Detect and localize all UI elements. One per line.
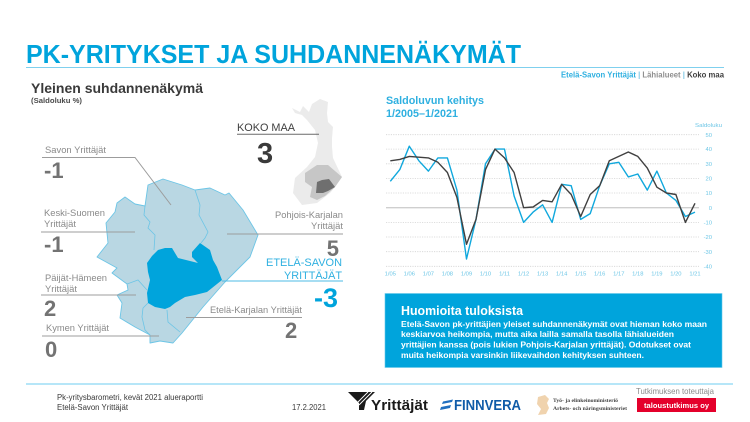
x axis labels: 1/06 xyxy=(404,272,415,278)
logo: Taloustutkimus: Tutkimuksen toteuttaja xyxy=(636,386,714,396)
label: Koko maa: 3 xyxy=(257,138,273,170)
label: Keski-Suomen Yrittäjät: -1 xyxy=(44,232,64,257)
label: Etelä-Karjalan Yrittäjät xyxy=(186,305,302,343)
region borders xyxy=(127,190,208,335)
label: Kymen Yrittäjät: Kymen Yrittäjät xyxy=(46,323,109,333)
label: Koko maa: KOKO MAA xyxy=(237,122,296,134)
x axis labels: 1/21 xyxy=(689,272,701,278)
line chart: balance 1/2005–1/2021 xyxy=(385,123,722,278)
x axis labels: 1/07 xyxy=(423,272,434,278)
label: Etelä-Karjalan Yrittäjät: Etelä-Karjalan Yrittäjät xyxy=(210,305,302,315)
panel: notes on results xyxy=(385,294,722,368)
y axis labels: 30 xyxy=(706,162,712,168)
label: Pohjois-Karjalan Yrittäjät: Pohjois-Karjalan xyxy=(275,210,343,220)
x axis labels: 1/12 xyxy=(518,272,529,278)
region outline xyxy=(97,179,258,343)
label: Pohjois-Karjalan Yrittäjät: 5 xyxy=(327,236,339,261)
label: Savon Yrittäjät xyxy=(42,145,171,205)
label: Keski-Suomen Yrittäjät: Yrittäjät xyxy=(44,219,76,229)
logo: Finnvera: FINNVERA xyxy=(454,397,521,414)
panel: notes on results: Etelä-Savon pk-yrittäjien yleiset suhdannenäkymät ovat hieman koko maan xyxy=(401,320,707,329)
footer: report name xyxy=(57,393,203,412)
label: Päijät-Hämeen Yrittäjät: Päijät-Hämeen xyxy=(45,273,107,283)
logo: ministry: Arbets- och näringsministeriet xyxy=(553,406,627,412)
y axis labels: -30 xyxy=(704,250,712,256)
y axis labels: -40 xyxy=(704,264,712,270)
label: Kymen Yrittäjät xyxy=(42,323,159,362)
y axis labels: 20 xyxy=(706,176,712,182)
x axis labels: 1/08 xyxy=(442,272,453,278)
label: Savon Yrittäjät: -1 xyxy=(44,158,64,183)
logo: ministry xyxy=(537,395,627,415)
logo: Taloustutkimus: taloustutkimus oy xyxy=(644,401,710,410)
label: Etelä-Savon Yrittäjät: -3 xyxy=(314,283,338,313)
x axis labels: 1/15 xyxy=(575,272,586,278)
heading: general outlook: Yleinen suhdannenäkymä xyxy=(31,80,203,96)
logo: Taloustutkimus xyxy=(636,386,716,412)
x axis labels: 1/19 xyxy=(651,272,663,278)
label: Päijät-Hämeen Yrittäjät xyxy=(41,273,136,321)
y axis labels: 10 xyxy=(706,191,712,197)
logo: ministry: Työ- ja elinkeinoministeriö xyxy=(553,398,618,404)
heading: balance trend: Saldoluvun kehitys xyxy=(386,95,484,107)
label: Etelä-Savon Yrittäjät xyxy=(222,257,343,313)
y axis labels xyxy=(695,123,722,270)
logo: Yrittäjät: Yrittäjät xyxy=(371,397,428,414)
y axis labels: -20 xyxy=(704,235,712,241)
series: Koko maa xyxy=(390,149,695,244)
x axis labels: 1/10 xyxy=(480,272,491,278)
label: Keski-Suomen Yrittäjät: Keski-Suomen xyxy=(44,208,105,218)
label: Koko maa xyxy=(237,122,319,170)
label: Pohjois-Karjalan Yrittäjät xyxy=(227,210,343,261)
label: Pohjois-Karjalan Yrittäjät: Yrittäjät xyxy=(311,221,343,231)
series: Etelä-Savon Yrittäjät xyxy=(390,146,695,259)
panel: notes on results: muita heikompia varsinkin liikevaihdon kehityksen suhteen. xyxy=(401,351,644,360)
legend: colour key: Etelä-Savon Yrittäjät | Lähialueet | Koko maa xyxy=(561,70,725,80)
highlighted region: Etelä-Savo xyxy=(147,243,222,309)
footer: report name: Pk-yritysbarometri, kevät 2021 alueraportti xyxy=(57,393,203,402)
footer: report name: Etelä-Savon Yrittäjät xyxy=(57,403,129,412)
y axis labels: 0 xyxy=(709,206,712,212)
map: Etelä-Savo and neighbouring regions xyxy=(97,179,258,343)
x axis labels: 1/17 xyxy=(613,272,624,278)
x axis labels: 1/14 xyxy=(556,272,568,278)
x axis labels xyxy=(385,272,701,278)
footer: date: 17.2.2021 xyxy=(292,403,327,412)
x axis labels: 1/13 xyxy=(537,272,548,278)
panel: notes on results: keskiarvoa heikompia, mutta aika lailla samalla tasolla lähialueiden xyxy=(401,330,674,339)
label: Etelä-Savon Yrittäjät: YRITTÄJÄT xyxy=(284,270,342,282)
x axis labels: 1/05 xyxy=(385,272,396,278)
title: PK-YRITYKSET JA SUHDANNENÄKYMÄT xyxy=(26,41,521,69)
map: Finland locator xyxy=(292,99,342,205)
heading: general outlook xyxy=(31,80,203,105)
heading: general outlook: (Saldoluku %) xyxy=(31,98,82,105)
y axis labels: 50 xyxy=(706,133,712,139)
y axis labels: 40 xyxy=(706,147,712,153)
y axis labels: Saldoluku xyxy=(695,123,722,129)
label: Päijät-Hämeen Yrittäjät: Yrittäjät xyxy=(45,284,77,294)
label: Kymen Yrittäjät: 0 xyxy=(45,337,57,362)
y axis labels: -10 xyxy=(704,220,712,226)
label: Savon Yrittäjät: Savon Yrittäjät xyxy=(45,145,106,155)
x axis labels: 1/18 xyxy=(632,272,643,278)
label: Etelä-Karjalan Yrittäjät: 2 xyxy=(285,318,297,343)
x axis labels: 1/20 xyxy=(670,272,682,278)
x axis labels: 1/11 xyxy=(499,272,510,278)
x axis labels: 1/09 xyxy=(461,272,472,278)
logo: Yrittäjät xyxy=(348,392,428,414)
label: Päijät-Hämeen Yrittäjät: 2 xyxy=(44,296,56,321)
panel: notes on results: Huomioita tuloksista xyxy=(401,304,524,318)
label: Keski-Suomen Yrittäjät xyxy=(41,208,135,257)
heading: balance trend xyxy=(386,95,484,120)
label: Etelä-Savon Yrittäjät: ETELÄ-SAVON xyxy=(266,257,342,269)
panel: notes on results: yrittäjien kanssa (pois lukien Pohjois-Karjalan yrittäjät). Odotukset ovat xyxy=(401,341,691,350)
x axis labels: 1/16 xyxy=(594,272,605,278)
heading: balance trend: 1/2005–1/2021 xyxy=(386,108,458,120)
